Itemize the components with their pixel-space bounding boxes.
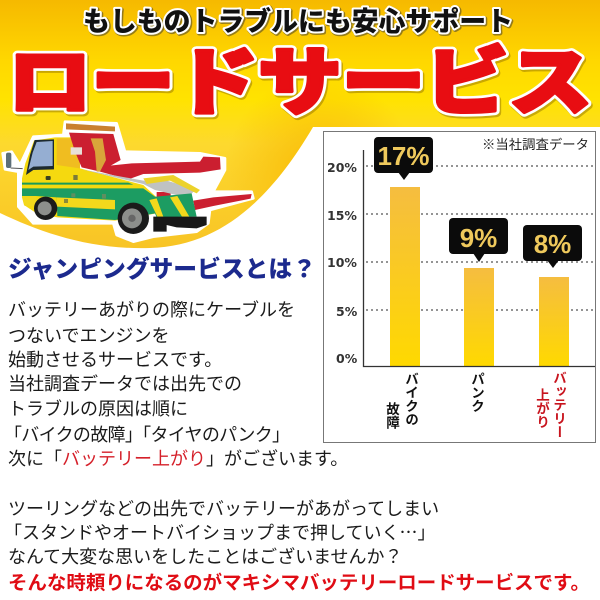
intro paragraph: 当社調査データでは出先での bbox=[8, 370, 242, 396]
intro paragraph: 始動させるサービスです。 bbox=[8, 346, 222, 372]
intro paragraph bbox=[4, 296, 348, 471]
chart frame bbox=[324, 132, 596, 442]
callout: 17%: 17% bbox=[377, 141, 430, 171]
truck warning light bar bbox=[66, 123, 115, 131]
main title: ロードサービス bbox=[10, 26, 594, 132]
y axis labels: 10% bbox=[327, 255, 357, 270]
subtitle: もしものトラブルにも安心サポート bbox=[84, 7, 514, 38]
y axis labels: 0% bbox=[336, 351, 358, 366]
x label: battery bbox=[533, 371, 570, 438]
truck cab and body bbox=[22, 137, 157, 221]
touring paragraph bbox=[4, 495, 439, 569]
x label: bike breakdown: バイクの bbox=[402, 372, 422, 426]
yellow header background bbox=[0, 0, 600, 248]
chart panel bbox=[324, 132, 596, 442]
main title: ロードサービス bbox=[8, 24, 592, 129]
tow truck illustration bbox=[3, 122, 253, 242]
x label: bike breakdown: 故障 bbox=[383, 401, 403, 430]
y axis labels: 20% bbox=[327, 160, 357, 175]
subtitle: もしものトラブルにも安心サポート bbox=[83, 6, 513, 37]
truck crane cab window bbox=[91, 138, 106, 172]
intro paragraph: 次に「バッテリー上がり」がございます。 bbox=[8, 445, 348, 471]
truck rear chevrons bbox=[148, 193, 207, 232]
callout: 8% bbox=[523, 225, 582, 268]
x label: battery: 上がり bbox=[533, 388, 553, 429]
y axis labels: 5% bbox=[336, 304, 358, 319]
red closing statement: そんな時頼りになるのがマキシマバッテリーロードサービスです。 bbox=[8, 571, 590, 594]
callout: 9% bbox=[449, 218, 508, 262]
truck window bbox=[26, 139, 54, 175]
intro paragraph: バッテリーあがりの際にケーブルを bbox=[8, 296, 295, 322]
touring paragraph: 「スタンドやオートバイショップまで押していく…」 bbox=[4, 519, 435, 545]
y axis labels bbox=[327, 160, 358, 366]
intro paragraph: トラブルの原因は順に bbox=[8, 395, 188, 421]
intro paragraph: つないでエンジンを bbox=[8, 322, 169, 348]
callout: 9%: 9% bbox=[460, 223, 497, 253]
source note: ※当社調査データ bbox=[482, 137, 589, 152]
axes bbox=[364, 150, 595, 366]
callout: 17% bbox=[374, 137, 433, 180]
touring paragraph: ツーリングなどの出先でバッテリーがあがってしまい bbox=[8, 495, 439, 521]
x label: puncture: パンク bbox=[468, 372, 488, 413]
section heading: ジャンピングサービスとは？ bbox=[8, 255, 316, 282]
callout: 8%: 8% bbox=[534, 229, 571, 259]
x label: battery: バッテリー bbox=[550, 371, 570, 438]
bars bbox=[390, 187, 569, 366]
truck flatbed bbox=[82, 169, 197, 197]
truck mirror bbox=[6, 153, 23, 169]
intro paragraph: 「バイクの故障」「タイヤのパンク」 bbox=[4, 421, 290, 447]
touring paragraph: なんて大変な思いをしたことはございませんか？ bbox=[8, 543, 403, 569]
main title: ロードサービス bbox=[8, 24, 592, 129]
truck rear wheel bbox=[118, 203, 149, 234]
truck front wheel bbox=[34, 197, 57, 220]
truck white outline bbox=[3, 122, 253, 242]
truck crane bbox=[69, 133, 252, 210]
y axis labels: 15% bbox=[327, 208, 357, 223]
x label: bike breakdown bbox=[383, 372, 422, 430]
